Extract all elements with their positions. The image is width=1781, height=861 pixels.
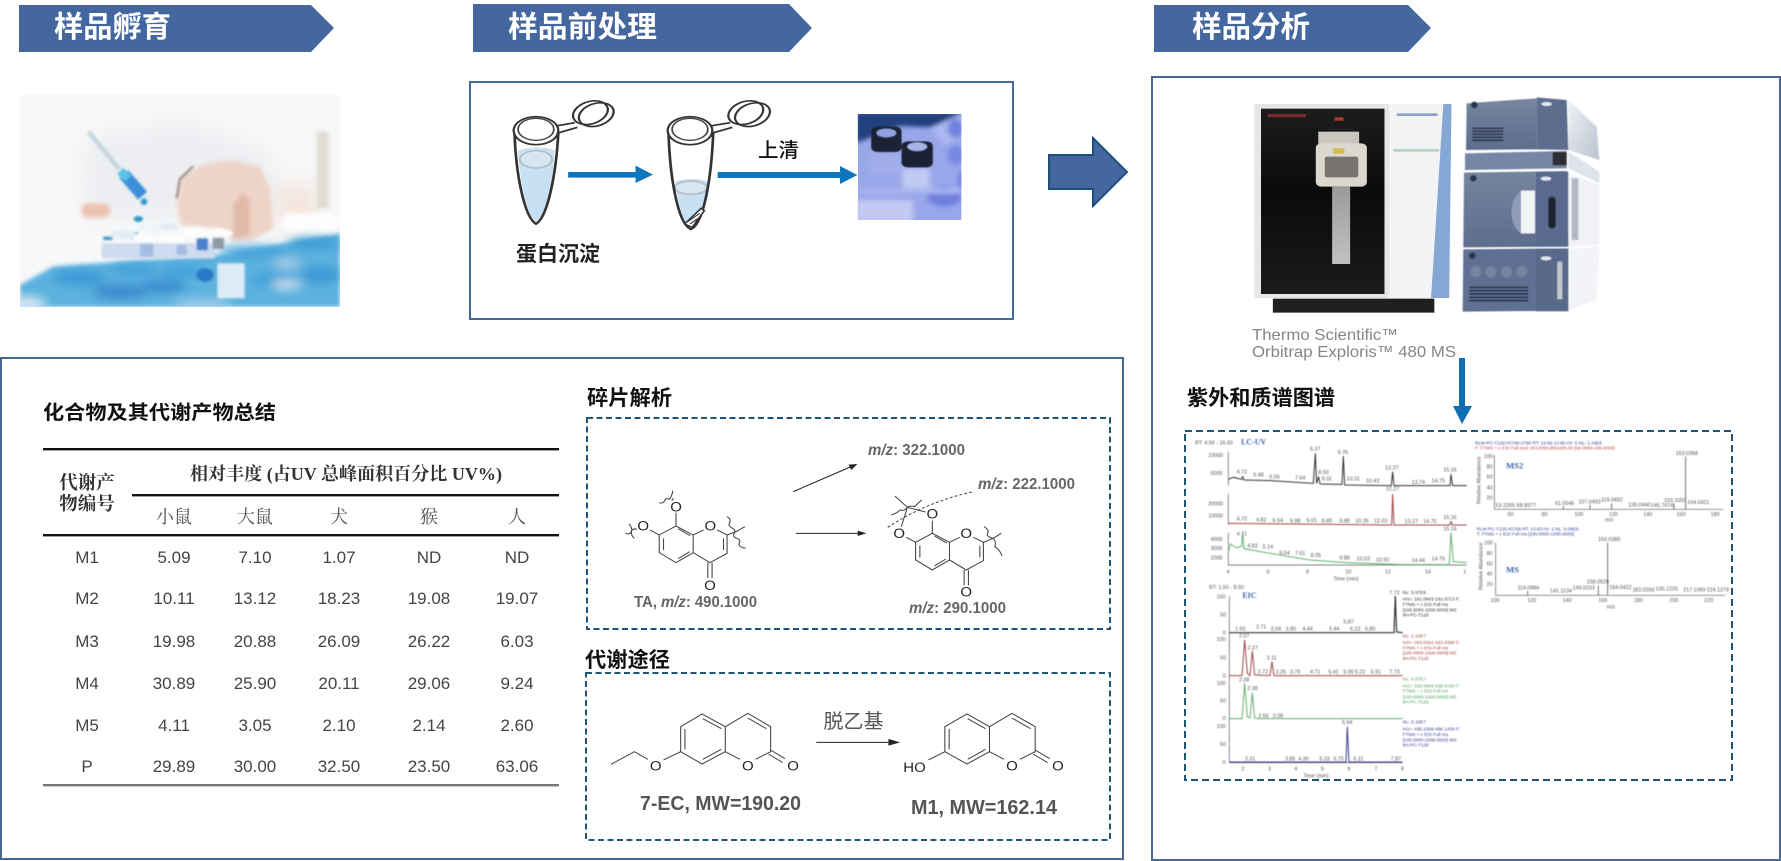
structure: fragment 290	[888, 492, 1002, 601]
table: relative abundance by species: 23.50	[408, 757, 450, 776]
table: relative abundance by species: 10.11	[153, 589, 195, 608]
table: relative abundance by species: 20.11	[318, 674, 360, 693]
chart: EIC chromatograms: 3.80	[1286, 627, 1296, 633]
header: 样品分析: 样品分析	[1192, 11, 1310, 44]
chart: EIC chromatograms: 5	[1321, 767, 1324, 773]
structure: M1: O	[1006, 759, 1018, 775]
chart: EIC chromatograms: FTMS + c ESI Full ms	[1403, 602, 1449, 607]
chart: EIC chromatograms: 2.72	[1258, 670, 1268, 676]
structure: 7-EC: O	[650, 759, 662, 775]
chart: EIC chromatograms: 0	[1223, 673, 1226, 679]
table: relative abundance by species: 小鼠	[156, 507, 192, 527]
chart: EIC chromatograms: 2.31	[1245, 756, 1255, 762]
chart: EIC chromatograms: 2.38	[1247, 686, 1258, 692]
table: relative abundance by species: 人	[508, 507, 526, 527]
chart: LC-UV chromatograms: 9.88	[1339, 518, 1350, 524]
table: relative abundance by species: 32.50	[318, 757, 360, 776]
table: relative abundance by species: 63.06	[496, 757, 538, 776]
chart: MS2 and MS spectra: 200	[1669, 598, 1678, 604]
chart: LC-UV chromatograms: 2000	[1211, 555, 1223, 561]
chart: EIC chromatograms: 3	[1268, 767, 1271, 773]
chart: EIC chromatograms: 2.71	[1256, 625, 1266, 631]
chart: MS2 and MS spectra: 140	[1643, 512, 1652, 518]
table: relative abundance by species: 18.23	[318, 589, 360, 608]
arrow: flow to sample analysis	[1049, 138, 1127, 206]
label: 上清: 上清	[758, 139, 799, 162]
chart: EIC chromatograms: 50	[1220, 613, 1226, 619]
structure: TA: O	[704, 519, 716, 535]
label: 290: m/z: 290.1000	[909, 600, 1006, 617]
icon: tube with protein solution	[514, 96, 620, 224]
chart: EIC chromatograms: 2.07	[1239, 634, 1249, 640]
chart: EIC chromatograms: RT: 1.50 - 8.00	[1209, 585, 1244, 591]
chart: MS2 and MS spectra: 80	[1487, 465, 1493, 471]
chart: LC-UV chromatograms: 14	[1425, 569, 1431, 575]
chart: MS2 and MS spectra: 20	[1487, 495, 1493, 501]
chart: LC-UV chromatograms: 15.16	[1443, 515, 1457, 521]
label: M1: M1, MW=162.14	[911, 797, 1058, 819]
table: relative abundance by species: 29.89	[153, 757, 195, 776]
chart: MS2 and MS spectra: 224.1279	[1707, 588, 1729, 594]
chart: EIC chromatograms: NL: 5.57E6	[1403, 590, 1426, 595]
chart: LC-UV chromatograms: 9.01	[1322, 476, 1332, 482]
chart: EIC chromatograms: 6.80	[1365, 627, 1375, 633]
chart: EIC chromatograms: 5.41	[1328, 670, 1339, 676]
chart: EIC chromatograms: 100	[1217, 724, 1226, 730]
chart: LC-UV chromatograms: 6.37	[1310, 447, 1320, 453]
chart: MS2 and MS spectra: 100	[1484, 454, 1493, 460]
chart: EIC chromatograms: 7	[1374, 767, 1377, 773]
arrow: to fragment 290	[796, 531, 866, 536]
chart: EIC chromatograms: 2.37	[1247, 645, 1258, 651]
chart: EIC chromatograms: 7.87	[1391, 756, 1401, 762]
arrow: deethylation	[816, 739, 900, 746]
arrow: to fragment 322	[793, 464, 857, 492]
chart: MS2 and MS spectra: 60	[1508, 512, 1514, 518]
chart: EIC chromatograms: 7.73	[1389, 670, 1400, 676]
header: 样品分析	[1154, 5, 1431, 52]
arrow: tube to tube	[568, 166, 653, 183]
table: relative abundance by species: 30.00	[234, 757, 276, 776]
chart: MS2 and MS spectra: 119.0984	[1517, 585, 1539, 591]
header: 样品孵育	[19, 5, 334, 52]
chart: LC-UV chromatograms: 5000	[1211, 471, 1223, 477]
chart: EIC chromatograms: m/z= 496.1359-496.1409 F:	[1403, 726, 1460, 731]
chart: LC-UV chromatograms: 4.71	[1237, 532, 1247, 538]
chart: MS2 and MS spectra: 91.0546	[1555, 501, 1574, 507]
step diagram: tubes, arrows and vial photo	[514, 96, 967, 229]
chart: EIC chromatograms: m/z= 191.0663-191.0713 F:	[1403, 597, 1460, 602]
chart: EIC chromatograms: 8	[1401, 767, 1404, 773]
table: relative abundance by species: 3.05	[238, 716, 272, 735]
chart: LC-UV chromatograms: 8.80	[1322, 518, 1332, 524]
chart: MS2 and MS spectra: T: FTMS + c ESI Full ms [100.0000-1000.0000]	[1477, 532, 1574, 537]
chart: EIC chromatograms: 100	[1217, 637, 1226, 643]
chart: EIC chromatograms: 5.44	[1329, 626, 1339, 632]
icon: tube with pellet	[668, 96, 776, 229]
chart: MS2 and MS spectra: 120	[1527, 598, 1536, 604]
chart: MS2 and MS spectra: 160	[1677, 512, 1686, 518]
chart: LC-UV chromatograms: 12	[1385, 569, 1391, 575]
chart: EIC chromatograms: 6.91	[1371, 670, 1381, 676]
structure: TA: O	[670, 500, 682, 515]
chart: LC-UV chromatograms: 1	[1463, 569, 1466, 575]
photo: pipette dropping blue liquid into vials	[7, 95, 340, 310]
table: relative abundance by species: M2	[75, 589, 99, 608]
arrow: supernatant to vial	[718, 166, 857, 184]
chart: EIC chromatograms	[1209, 585, 1460, 779]
table: relative abundance by species: ND	[417, 548, 441, 567]
chart: MS2 and MS spectra: Relative Abundance	[1477, 457, 1483, 504]
chart: LC-UV chromatograms: 6.54	[1279, 550, 1290, 556]
label: 7-EC: 7-EC, MW=190.20	[640, 793, 801, 815]
chart: MS2 and MS spectra: 183.0266	[1632, 588, 1655, 594]
caption: instrument name	[1252, 327, 1456, 361]
chart: EIC chromatograms: 3.79	[1290, 670, 1300, 676]
spectra panel	[1185, 431, 1732, 780]
structure: M1	[903, 713, 1064, 776]
chart: LC-UV chromatograms: 14.75	[1423, 519, 1437, 525]
label: TA: TA, m/z: 490.1000	[634, 594, 757, 611]
chart: EIC chromatograms: 0	[1223, 760, 1226, 766]
chart: MS2 and MS spectra: 100	[1574, 512, 1583, 518]
chart: MS2 and MS spectra: 100	[1491, 598, 1500, 604]
chart: LC-UV chromatograms: 12.27	[1386, 487, 1399, 493]
table: relative abundance by species	[43, 448, 559, 786]
structure: 7-EC: O	[742, 759, 754, 775]
heading: 化合物及其代谢产物总结: 化合物及其代谢产物总结	[43, 402, 276, 424]
chart: EIC chromatograms: 5.94	[1342, 720, 1352, 726]
illustration: Orbitrap mass spectrometer and UHPLC	[1254, 97, 1599, 313]
chart: MS2 and MS spectra: 145.7474	[1651, 503, 1673, 509]
chart: EIC chromatograms: 3.11	[1267, 655, 1277, 661]
instrument: mass spectrometer	[1254, 104, 1452, 313]
chart: MS2 and MS spectra: 153.1050	[1664, 498, 1686, 504]
chart: LC-UV chromatograms: 6.54	[1273, 518, 1283, 524]
table: relative abundance by species: 相对丰度 (占UV 总峰面积百分比 UV%)	[190, 463, 502, 485]
chart: LC-UV chromatograms: 8.50	[1318, 470, 1329, 476]
chart: EIC chromatograms: FTMS + c ESI Full ms	[1403, 732, 1449, 737]
chart: MS2 and MS spectra: 217.1069	[1683, 588, 1706, 594]
chart: EIC chromatograms: 3.85	[1285, 756, 1295, 762]
chart: EIC chromatograms: 3.04	[1271, 627, 1281, 633]
table: relative abundance by species: 19.98	[153, 632, 195, 651]
panel: 样品前处理	[470, 82, 1013, 319]
chart: EIC chromatograms: 4.44	[1302, 627, 1313, 633]
chart: MS2 and MS spectra: 80	[1487, 551, 1493, 557]
chart: MS2 and MS spectra: 40	[1487, 572, 1493, 578]
chart: EIC chromatograms: 6.22	[1355, 670, 1365, 676]
label: 蛋白沉淀: 蛋白沉淀	[516, 243, 600, 266]
table: relative abundance by species: 4.11	[158, 716, 190, 735]
table: relative abundance by species: 猴	[420, 507, 438, 527]
chart: LC-UV chromatograms: 6.01	[1307, 518, 1317, 524]
chart: LC-UV chromatograms: 4	[1227, 569, 1230, 575]
chart: LC-UV chromatograms: 7.01	[1295, 551, 1305, 557]
table: relative abundance by species: 26.22	[408, 632, 450, 651]
structure: fragment 290: O	[893, 526, 905, 542]
chart: MS2 and MS spectra: 164.0422	[1609, 585, 1632, 591]
chart: MS2 and MS spectra: F: FTMS + c ESI Full ms2 163.0381@hcd35.00 [50.0000-185.0000]	[1475, 445, 1615, 450]
chart: LC-UV chromatograms: 13.27	[1405, 519, 1418, 525]
chart: EIC chromatograms: 5.33	[1319, 756, 1330, 762]
chart: MS2 and MS spectra: 164.0421	[1687, 500, 1710, 506]
chart: LC-UV chromatograms: 14.75	[1432, 556, 1445, 562]
chart: EIC chromatograms: 5.75	[1333, 756, 1344, 762]
table: relative abundance by species: M1	[75, 548, 99, 567]
table: relative abundance by species: ND	[505, 548, 529, 567]
table: relative abundance by species: 19.08	[408, 589, 450, 608]
chart: MS2 and MS spectra	[1475, 440, 1729, 611]
chart: EIC chromatograms: 2.08	[1239, 677, 1249, 683]
chart: EIC chromatograms: m/z= 339.0694-339.0720 F:	[1403, 683, 1460, 688]
chart: MS2 and MS spectra: 135.0440	[1628, 503, 1651, 509]
table: relative abundance by species: 20.88	[234, 632, 276, 651]
caption: instrument name: Orbitrap Exploris™ 480 MS	[1252, 344, 1456, 361]
chart: MS2 and MS spectra: 141.1134	[1550, 588, 1572, 594]
chart: MS2 and MS spectra: RLM-PC-T120.#2759 RT: 13.63 AV: 1 NL: 9.09E6	[1477, 527, 1579, 532]
chart: EIC chromatograms: NL: 5.18E7	[1403, 720, 1426, 725]
chart: LC-UV chromatograms: 4.72	[1237, 469, 1247, 475]
table: relative abundance by species: 26.09	[318, 632, 360, 651]
chart: MS2 and MS spectra: m/z	[1607, 605, 1616, 611]
chart: MS2 and MS spectra: MS2	[1506, 461, 1523, 471]
chart: EIC chromatograms: 100	[1217, 681, 1226, 687]
table: relative abundance by species: P	[81, 757, 93, 776]
table: relative abundance by species: 6.03	[500, 632, 534, 651]
chart: EIC chromatograms: 1.93	[1235, 627, 1245, 633]
chart: EIC chromatograms: 6	[1348, 767, 1351, 773]
chart: LC-UV chromatograms: 6	[1267, 569, 1270, 575]
chart: LC-UV chromatograms: 14.44	[1412, 558, 1425, 564]
table: relative abundance by species: M4	[75, 674, 99, 693]
panel: compound and metabolite summary	[1, 358, 1123, 859]
structure: TA	[625, 491, 746, 594]
table: relative abundance by species: 19.07	[496, 589, 538, 608]
chart: EIC chromatograms: m/z= 163.0362-163.0388 F:	[1403, 640, 1460, 645]
chart: EIC chromatograms: 0	[1223, 630, 1226, 636]
chart: LC-UV chromatograms: 8	[1306, 569, 1309, 575]
chart: LC-UV chromatograms: 3000	[1211, 546, 1223, 552]
chart: MS2 and MS spectra: 180	[1711, 512, 1720, 518]
chart: LC-UV chromatograms	[1195, 438, 1467, 582]
table: relative abundance by species: 大鼠	[237, 507, 273, 527]
chart: MS2 and MS spectra: m/z	[1605, 518, 1614, 524]
panel: metabolic pathway	[586, 673, 1110, 840]
chart: LC-UV chromatograms: 15.16	[1443, 526, 1457, 532]
chart: MS2 and MS spectra: 100	[1484, 541, 1493, 547]
chart: MS2 and MS spectra: 220	[1704, 598, 1713, 604]
chart: EIC chromatograms: 0	[1223, 716, 1226, 722]
table: relative abundance by species: M5	[75, 716, 99, 735]
chart: EIC chromatograms: NL: 4.57E7	[1403, 677, 1426, 682]
chart: LC-UV chromatograms: Time (min)	[1333, 576, 1359, 582]
chart: MS2 and MS spectra: 60	[1487, 561, 1493, 567]
structure: fragment 290: O	[927, 507, 938, 522]
table: relative abundance by species: 2.14	[412, 716, 446, 735]
chart: MS2 and MS spectra: 160	[1598, 598, 1607, 604]
chart: MS2 and MS spectra: 107.0493	[1578, 499, 1601, 505]
table: relative abundance by species: 30.89	[153, 674, 195, 693]
chart: MS2 and MS spectra: 80	[1542, 512, 1548, 518]
table: relative abundance by species: M3	[75, 632, 99, 651]
chart: MS2 and MS spectra: 180	[1634, 598, 1643, 604]
chart: MS2 and MS spectra: 149.0233	[1573, 585, 1595, 591]
chart: MS2 and MS spectra: MS	[1506, 564, 1519, 574]
chart: EIC chromatograms: 50	[1220, 742, 1226, 748]
label: 222: m/z: 222.1000	[978, 476, 1075, 493]
chart: EIC chromatograms: 4.71	[1310, 670, 1320, 676]
chart: EIC chromatograms: Time (min)	[1303, 773, 1329, 779]
chart: LC-UV chromatograms: 6.06	[1269, 475, 1280, 481]
structure: TA: O	[637, 519, 649, 535]
chart: LC-UV chromatograms: 9.88	[1339, 555, 1350, 561]
table: relative abundance by species: 25.90	[234, 674, 276, 693]
chart: EIC chromatograms: [100.0000-1500.0000] MS	[1403, 737, 1457, 742]
chart: LC-UV chromatograms: 12.27	[1385, 465, 1399, 471]
chart: EIC chromatograms: 4.30	[1298, 756, 1309, 762]
header: 样品前处理: 样品前处理	[508, 11, 657, 44]
chart: LC-UV chromatograms: RT: 4.00 - 16.00	[1195, 441, 1233, 447]
header: 样品孵育: 样品孵育	[54, 11, 171, 44]
chart: MS2 and MS spectra: 163.0368	[1676, 451, 1698, 457]
structure: TA: O	[704, 578, 716, 594]
chart: EIC chromatograms: 100	[1217, 594, 1226, 600]
chart: EIC chromatograms: 3.08	[1273, 713, 1283, 719]
chart: EIC chromatograms: FTMS + c ESI Full ms	[1403, 689, 1449, 694]
chart: MS2 and MS spectra: 195.1226	[1656, 586, 1678, 592]
chart: LC-UV chromatograms: 10.03	[1357, 556, 1370, 562]
chart: EIC chromatograms: 9H-PC-T120	[1403, 613, 1429, 618]
chart: LC-UV chromatograms: 13.74	[1412, 480, 1425, 486]
structure: fragment 290: O	[960, 585, 972, 601]
label: 322: m/z: 322.1000	[868, 442, 965, 459]
panel: 样品分析	[1152, 77, 1780, 860]
structure: 7-EC: O	[787, 759, 799, 775]
chart: MS2 and MS spectra: 60	[1487, 475, 1493, 481]
chart: LC-UV chromatograms: 15.16	[1443, 468, 1457, 474]
chart: MS2 and MS spectra: 53.2265	[1496, 503, 1515, 509]
chart: LC-UV chromatograms: LC-UV	[1241, 438, 1267, 447]
chart: EIC chromatograms: NL: 2.10E7	[1403, 633, 1426, 638]
structure: M1: HO	[903, 760, 926, 776]
chart: MS2 and MS spectra: 20	[1487, 582, 1493, 588]
chart: LC-UV chromatograms: 10.31	[1347, 477, 1360, 483]
instrument: liquid chromatography stack	[1463, 97, 1599, 312]
chart: EIC chromatograms: 6.11	[1353, 756, 1363, 762]
chart: EIC chromatograms: 4	[1294, 767, 1297, 773]
table: relative abundance by species: 2.60	[500, 716, 534, 735]
chart: EIC chromatograms: [100.0000-1500.0000] MS	[1403, 651, 1457, 656]
chart: LC-UV chromatograms: 8.05	[1311, 553, 1321, 559]
chart: EIC chromatograms: 2.66	[1258, 713, 1269, 719]
chart: MS2 and MS spectra: 119.0492	[1601, 497, 1623, 503]
header: 样品前处理	[473, 4, 812, 52]
chart: EIC chromatograms: 6.23	[1350, 627, 1360, 633]
chart: MS2 and MS spectra: 120	[1609, 512, 1618, 518]
chart: EIC chromatograms: [100.0000-1500.0000] MS	[1403, 608, 1457, 613]
table: relative abundance by species: 1.07	[322, 548, 356, 567]
table: relative abundance by species: 2.10	[322, 716, 356, 735]
structure: fragment 290: O	[960, 526, 972, 542]
chart: LC-UV chromatograms: 4.72	[1237, 517, 1247, 523]
heading: 碎片解析: 碎片解析	[587, 387, 672, 410]
table: relative abundance by species: 物编号	[59, 494, 115, 515]
structure: M1: O	[1052, 759, 1064, 775]
chart: EIC chromatograms: 50	[1220, 699, 1226, 705]
chart: MS2 and MS spectra: 158.0529	[1587, 580, 1609, 586]
chart: LC-UV chromatograms: 10	[1345, 569, 1351, 575]
chart: EIC chromatograms: 9H-PC-T120	[1403, 743, 1429, 748]
table: relative abundance by species: 代谢产	[59, 473, 115, 494]
chart: LC-UV chromatograms: 10.92	[1376, 558, 1389, 564]
chart: LC-UV chromatograms: 4.82	[1256, 518, 1266, 524]
table: relative abundance by species: 29.06	[408, 674, 450, 693]
chart: LC-UV chromatograms: 10000	[1208, 453, 1223, 459]
chart: EIC chromatograms: 5.87	[1343, 619, 1354, 625]
chart: LC-UV chromatograms: 10.43	[1366, 479, 1379, 485]
table: relative abundance by species: 9.24	[500, 674, 534, 693]
table: relative abundance by species: 7.10	[238, 548, 272, 567]
chart: LC-UV chromatograms: 7.64	[1295, 475, 1305, 481]
chart: MS2 and MS spectra: RLM-PC-T120.#2746-2794 RT: 13.56-13.80 AV: 5 NL: 1.43E6	[1475, 440, 1602, 445]
chart: LC-UV chromatograms: 4.83	[1247, 544, 1258, 550]
chart: EIC chromatograms: 50	[1220, 655, 1226, 661]
heading: 代谢途径: 代谢途径	[585, 648, 670, 672]
chart: MS2 and MS spectra: Relative Abundance	[1479, 543, 1485, 590]
chart: EIC chromatograms: 9H-PC-T120	[1403, 699, 1429, 704]
chart: LC-UV chromatograms: 14.75	[1432, 479, 1445, 485]
chart: EIC chromatograms: [100.0000-1500.0000] MS	[1403, 694, 1457, 699]
chart: LC-UV chromatograms: 20000	[1208, 501, 1223, 507]
label: 脱乙基: 脱乙基	[824, 710, 884, 733]
chart: LC-UV chromatograms: 6.98	[1290, 518, 1300, 524]
chart: LC-UV chromatograms: 5.48	[1253, 473, 1264, 479]
chart: LC-UV chromatograms: 5.14	[1263, 544, 1273, 550]
chart: EIC chromatograms: FTMS + c ESI Full ms	[1403, 645, 1449, 650]
chart: LC-UV chromatograms: 12.03	[1374, 518, 1387, 524]
chart: LC-UV chromatograms: 4000	[1211, 537, 1223, 543]
chart: EIC chromatograms: 7.72	[1389, 591, 1400, 597]
chart: EIC chromatograms: 9H-PC-T120	[1403, 656, 1429, 661]
photo: sample vials in rack	[855, 112, 967, 222]
heading: 紫外和质谱图谱: 紫外和质谱图谱	[1187, 387, 1335, 410]
chart: EIC chromatograms: 3.26	[1276, 670, 1286, 676]
chart: MS2 and MS spectra: 163.0389	[1598, 537, 1620, 543]
chart: MS2 and MS spectra: 68.8977	[1517, 503, 1536, 509]
chart: EIC chromatograms: 2	[1241, 767, 1244, 773]
table: relative abundance by species: 13.12	[234, 589, 276, 608]
table: relative abundance by species: 5.09	[157, 548, 191, 567]
chart: LC-UV chromatograms: 10.26	[1355, 519, 1369, 525]
chart: LC-UV chromatograms: 9.76	[1338, 450, 1348, 456]
chart: LC-UV chromatograms: 10000	[1208, 513, 1223, 519]
table: relative abundance by species: 犬	[330, 507, 348, 527]
chart: EIC chromatograms: 5.96	[1343, 670, 1354, 676]
chart: MS2 and MS spectra: 140	[1563, 598, 1572, 604]
structure: 7-EC	[611, 713, 799, 775]
panel: fragment analysis	[587, 418, 1110, 629]
chart: MS2 and MS spectra: 40	[1487, 485, 1493, 491]
chart: EIC chromatograms: EIC	[1242, 591, 1257, 600]
arrow: instrument to spectra	[1453, 358, 1472, 424]
caption: instrument name: Thermo Scientific™	[1252, 327, 1398, 344]
